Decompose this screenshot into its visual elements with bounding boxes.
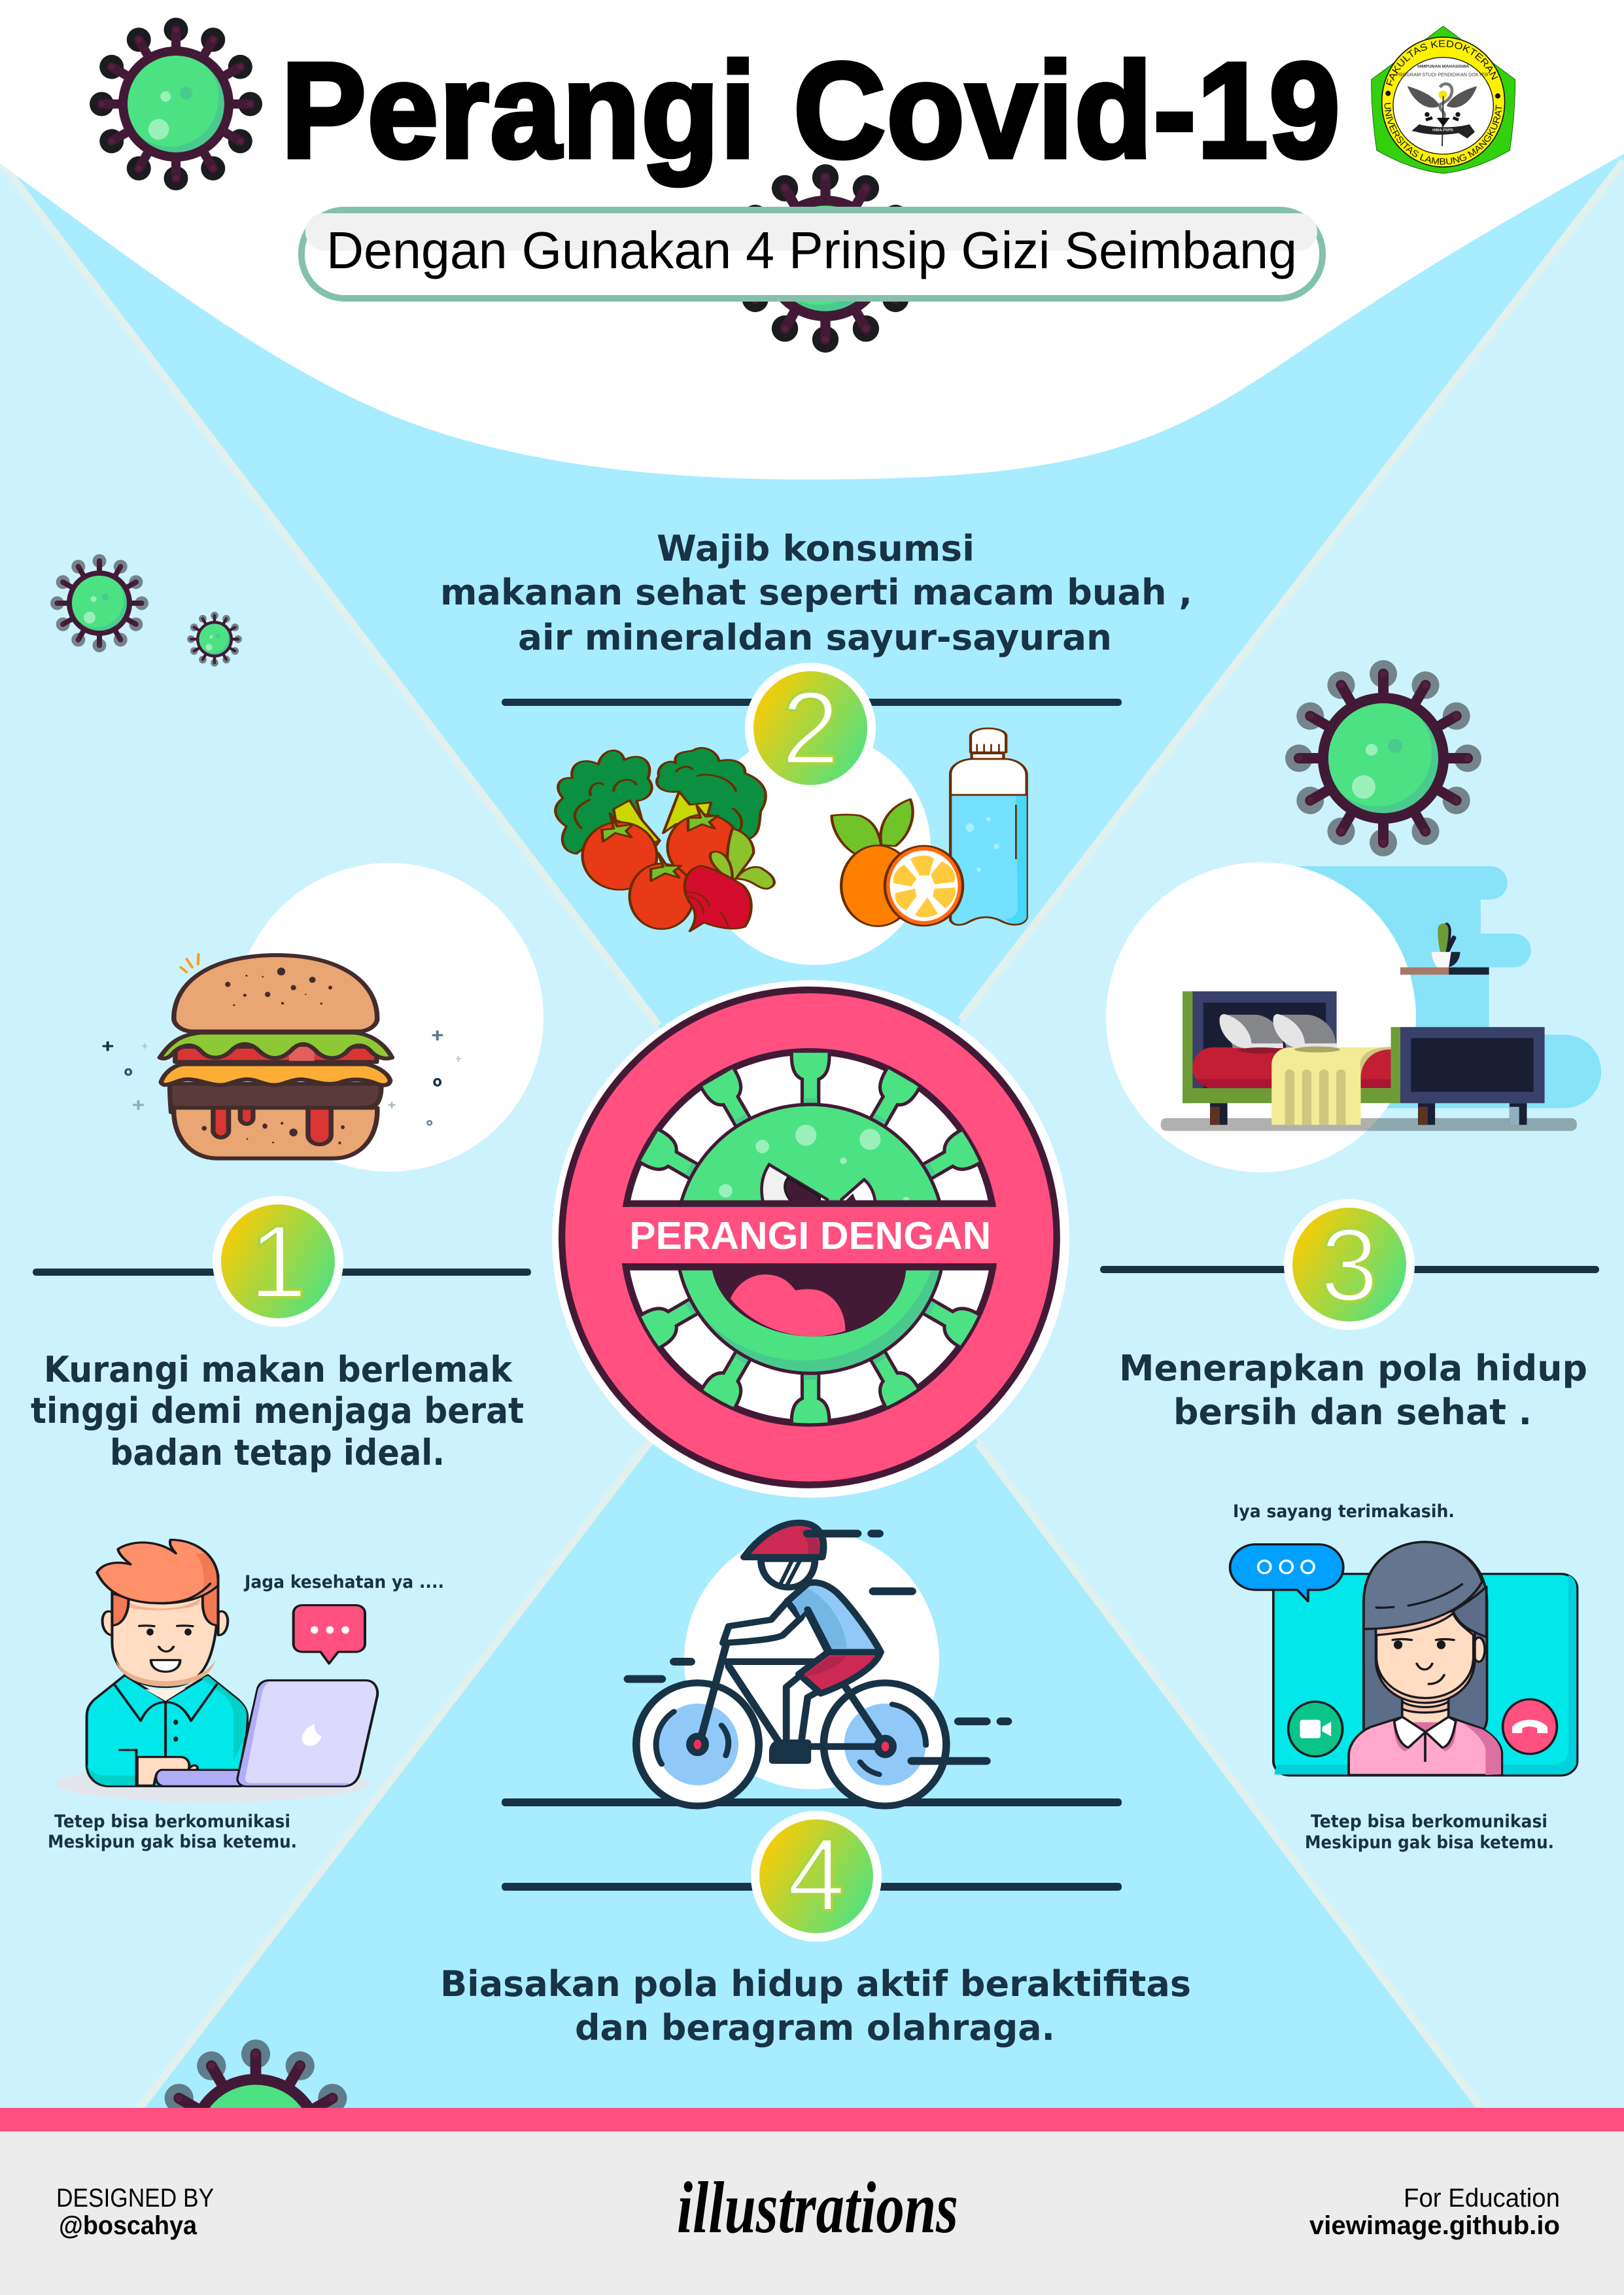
step 2 divider line [502, 699, 1122, 706]
water bottle [950, 728, 1027, 925]
illustration: man with laptop [56, 1540, 377, 1802]
blanket [1271, 1046, 1391, 1125]
white curved header area [0, 0, 1624, 480]
tomatoes [583, 806, 740, 929]
video button [1288, 1702, 1343, 1757]
motion lines [628, 1533, 1008, 1761]
white circle behind bed [1106, 862, 1416, 1172]
number badge 4 [751, 1811, 882, 1942]
ribbon band: PERANGI DENGAN [629, 1214, 991, 1257]
caption: right communication: Meskipun gak bisa ketemu. [1305, 1832, 1554, 1853]
illustration: woman video call [1230, 1542, 1578, 1776]
bed [1183, 991, 1400, 1125]
fringe [1364, 1542, 1487, 1637]
hair [97, 1540, 218, 1626]
number badge 2: 2 [782, 671, 839, 786]
neck and face [1376, 1610, 1485, 1732]
hand [137, 1757, 198, 1785]
footer credit right: For Education [1404, 2184, 1560, 2213]
step 4 divider line [502, 1883, 1122, 1891]
text: step 3: bersih dan sehat . [1173, 1392, 1532, 1433]
callout: iya sayang: Iya sayang terimakasih. [1233, 1501, 1455, 1522]
white circle behind cyclist [684, 1530, 939, 1789]
illustration: cyclist [628, 1523, 1008, 1806]
rider [723, 1523, 880, 1739]
end call button [1503, 1699, 1557, 1754]
text: step 1: Kurangi makan berlemak [44, 1349, 513, 1390]
icon: small viruses left [50, 554, 242, 667]
caption: right communication [1305, 1812, 1554, 1853]
icon: virus bottom left [153, 2040, 358, 2245]
text: step 1 [31, 1349, 524, 1473]
text: step 1: tinggi demi menjaga berat [31, 1390, 524, 1431]
number badge 3 [1100, 1199, 1599, 1330]
caption: right communication: Tetep bisa berkomunikasi [1311, 1812, 1547, 1832]
footer logo text: illustrations [677, 2167, 958, 2249]
number badge 3: 3 [1321, 1208, 1378, 1323]
title: Perangi Covid-19 [281, 34, 1340, 186]
footer credit left [56, 2184, 214, 2240]
virus face [667, 1089, 945, 1373]
chat bubble [1230, 1545, 1343, 1602]
broccoli [555, 748, 766, 854]
number badge 4: 4 [787, 1817, 845, 1933]
text: step 1: badan tetap ideal. [110, 1432, 445, 1473]
beetroot [685, 829, 774, 931]
footer credit right [1309, 2184, 1560, 2240]
text: step 3: Menerapkan pola hidup [1119, 1348, 1587, 1389]
text: step 3 [1119, 1348, 1587, 1433]
panel: left side background [0, 161, 719, 2108]
logo: faculty emblem: UNIVERSITAS LAMBUNG MANGKURAT [1384, 103, 1502, 165]
shirt [1349, 1717, 1502, 1775]
heading text: step 2: Wajib konsumsi [657, 528, 975, 569]
number badge 1: 1 [249, 1204, 307, 1320]
floor shadow [1161, 1118, 1577, 1131]
subtitle pill: Dengan Gunakan 4 Prinsip Gizi Seimbang [326, 221, 1297, 279]
heading text: step 2 [440, 528, 1192, 658]
logo: faculty emblem: PROGRAM STUDI PENDIDIKAN DOKTER [1396, 72, 1489, 78]
caption: left communication: Meskipun gak bisa ketemu. [48, 1832, 297, 1852]
number badge 1 [33, 1196, 531, 1327]
shelf with plant [1400, 922, 1489, 975]
illustration: bed and cabinet [1161, 922, 1577, 1131]
road line [502, 1798, 1122, 1806]
speech bubble [294, 1605, 365, 1664]
icon: large virus right [1285, 660, 1481, 856]
illustration: vegetables, fruit and water [555, 728, 1027, 931]
heading text: step 2: air mineraldan sayur-sayuran [518, 617, 1112, 658]
number badge 2 [745, 663, 876, 794]
icon: virus top left [90, 18, 262, 190]
caption: left communication: Tetep bisa berkomunikasi [54, 1812, 290, 1832]
caption: left communication [48, 1812, 297, 1852]
text: step 4: Biasakan pola hidup aktif beraktifitas [440, 1963, 1191, 2005]
bicycle wheels [636, 1683, 946, 1806]
footer [0, 2131, 1624, 2295]
panel: right side background [903, 161, 1624, 2108]
bicycle frame [690, 1645, 893, 1761]
footer credit left: DESIGNED BY [56, 2184, 214, 2213]
white circle behind food [698, 732, 931, 965]
call card [1273, 1574, 1578, 1776]
white circle behind burger [235, 863, 544, 1172]
head [103, 1591, 228, 1687]
badge: perangi dengan [552, 980, 1069, 1498]
shirt [87, 1675, 247, 1786]
footer credit right: viewimage.github.io [1309, 2211, 1560, 2240]
room backdrop blob [1266, 866, 1601, 1108]
subtitle pill [302, 210, 1322, 298]
logo: faculty emblem [1371, 26, 1516, 174]
callout: jaga kesehatan: Jaga kesehatan ya .... [243, 1572, 444, 1592]
cabinet [1400, 1027, 1545, 1125]
hair back [1364, 1542, 1487, 1732]
laptop [156, 1681, 377, 1786]
logo: faculty emblem: HIMA-PSPD [1432, 129, 1453, 133]
heading text: step 2: makanan sehat seperti macam buah , [440, 572, 1192, 613]
pink footer stripe [0, 2108, 1624, 2131]
illustration: burger [103, 954, 460, 1159]
footer credit left: @boscahya [59, 2211, 198, 2240]
orange [832, 799, 963, 926]
ribbon band [598, 1200, 1022, 1270]
icon: virus behind subtitle [731, 164, 920, 353]
text: step 4: dan beragram olahraga. [575, 2007, 1055, 2048]
text: step 4 [440, 1963, 1191, 2048]
logo: faculty emblem: HIMPUNAN MAHASISWA [1417, 64, 1469, 69]
logo: faculty emblem: FAKULTAS KEDOKTERAN [1386, 41, 1498, 86]
